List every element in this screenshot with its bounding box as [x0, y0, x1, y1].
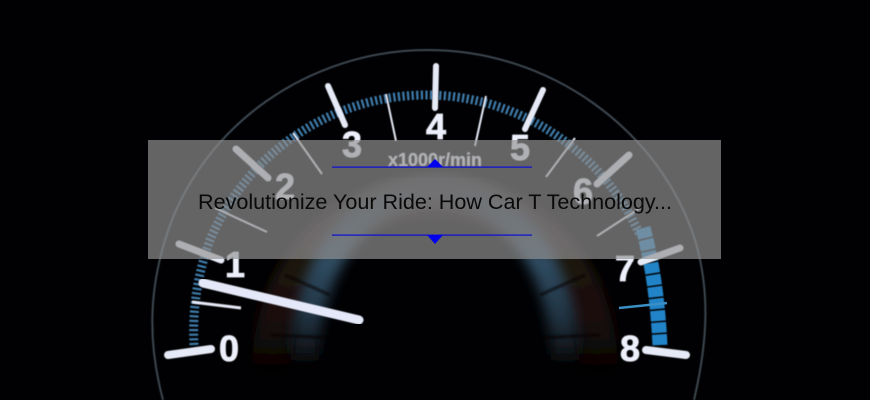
- major ticks: [168, 66, 686, 355]
- minor ticks: [192, 94, 640, 308]
- gauge numerals: 8: [620, 328, 640, 369]
- title overlay panel: [148, 140, 721, 259]
- bottom divider with triangle: [332, 234, 532, 244]
- gauge numerals: 5: [510, 127, 530, 168]
- red-zone blue segments: [643, 228, 660, 346]
- gauge numerals: 2: [275, 166, 295, 207]
- needle: [203, 283, 359, 320]
- gauge numerals: x1000r/min: [388, 150, 482, 170]
- gauge numerals: 0: [219, 328, 239, 369]
- outer gauge arc: [152, 50, 705, 400]
- blue scale ticks: [194, 95, 660, 346]
- gauge numerals: [219, 106, 640, 369]
- top divider with triangle: [332, 159, 532, 168]
- gauge numerals: 1: [225, 244, 245, 285]
- gauge numerals: 7: [615, 248, 635, 289]
- gauge numerals: 4: [426, 106, 446, 147]
- inner glowing arch: [270, 188, 600, 370]
- blue tick at 7.5: [619, 303, 667, 308]
- title text: Revolutionize Your Ride: How Car T Technology...: [198, 189, 672, 214]
- gauge numerals: 3: [342, 124, 362, 165]
- gauge numerals: 6: [573, 171, 593, 212]
